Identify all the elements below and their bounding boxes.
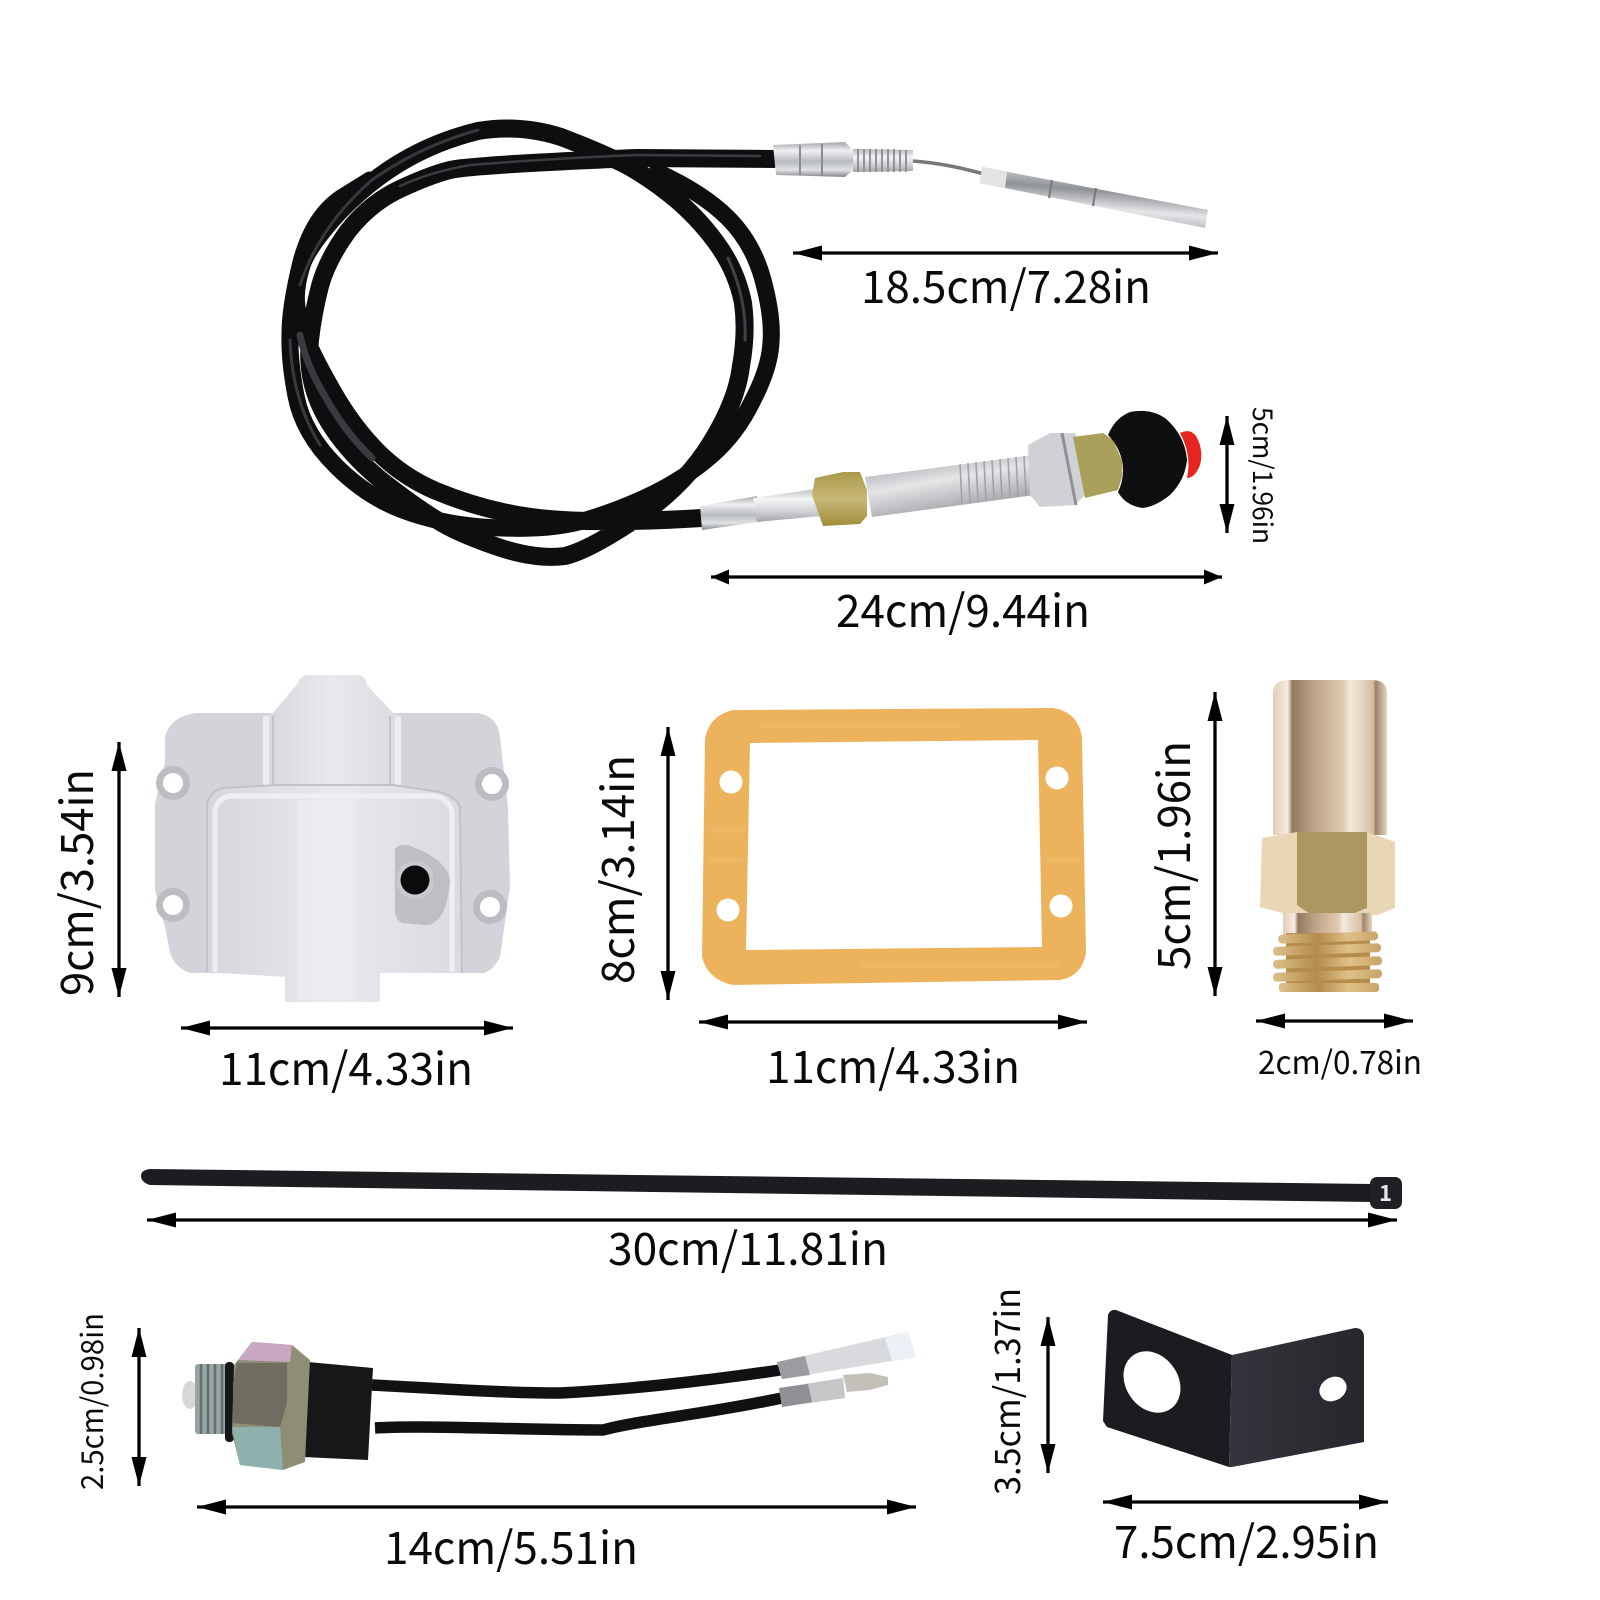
top boss xyxy=(263,675,400,790)
dimension: 3.5cm/1.37in: 3.5cm/1.37in xyxy=(980,1288,1031,1495)
bottom ferrule and threaded barrel xyxy=(700,433,1122,530)
hex nut xyxy=(232,1342,310,1470)
product: orange paper gasket xyxy=(702,708,1086,985)
dimension: 5cm/1.96in brass xyxy=(1138,692,1222,996)
dimension: 3.5cm/1.37in xyxy=(980,1288,1056,1495)
wire terminals xyxy=(777,1332,916,1407)
dimension: 18.5cm/7.28in xyxy=(793,246,1218,316)
product: push-pull control cable xyxy=(290,129,1208,557)
dimension: 11cm/4.33in cover: 11cm/4.33in xyxy=(219,1033,473,1098)
dimension: 14cm/5.51in: 14cm/5.51in xyxy=(384,1512,638,1577)
dimension: 9cm/3.54in: 9cm/3.54in xyxy=(41,769,106,996)
side port xyxy=(395,845,450,925)
central hump xyxy=(207,785,462,1002)
dimension: 7.5cm/2.95in: 7.5cm/2.95in xyxy=(1114,1506,1379,1571)
product: brass fitting xyxy=(1260,680,1395,992)
dimension: 9cm/3.54in xyxy=(41,742,126,997)
product: aluminium housing cover xyxy=(155,675,510,1002)
dimension: 18.5cm/7.28in: 18.5cm/7.28in xyxy=(861,251,1151,316)
dimension: 5cm/1.96in knob: 5cm/1.96in xyxy=(1245,407,1284,544)
dimension: 24cm/9.44in xyxy=(711,570,1222,640)
dimension: 2.5cm/0.98in: 2.5cm/0.98in xyxy=(68,1313,112,1490)
dimension: 2cm/0.78in xyxy=(1256,1014,1422,1084)
dimension: 11cm/4.33in cover xyxy=(181,1020,513,1098)
black cable loops xyxy=(290,129,773,557)
mounting plate xyxy=(155,713,510,973)
black body xyxy=(303,1362,373,1460)
gasket bolt holes xyxy=(716,766,1072,922)
product: black L bracket xyxy=(1103,1310,1364,1467)
zip tie head: 1 xyxy=(1379,1176,1392,1208)
bracket right face xyxy=(1229,1328,1364,1467)
zip tie head xyxy=(1370,1176,1402,1209)
dimension: 11cm/4.33in gasket: 11cm/4.33in xyxy=(766,1031,1020,1096)
dimension: 5cm/1.96in brass: 5cm/1.96in xyxy=(1138,741,1203,970)
dimension: 30cm/11.81in: 30cm/11.81in xyxy=(608,1213,888,1278)
dimension: 2cm/0.78in: 2cm/0.78in xyxy=(1258,1038,1422,1084)
product: black zip tie xyxy=(141,1169,1402,1209)
hex collar xyxy=(1260,832,1395,915)
dimension: 8cm/3.14in xyxy=(582,727,676,1000)
dimension: 11cm/4.33in gasket xyxy=(699,1014,1087,1096)
dimension: 2.5cm/0.98in xyxy=(68,1313,146,1490)
bracket left face xyxy=(1103,1310,1232,1467)
dimension: 5cm/1.96in knob xyxy=(1220,407,1284,544)
gasket texture xyxy=(708,725,1080,965)
dimension: 24cm/9.44in: 24cm/9.44in xyxy=(836,575,1090,640)
knob with red button xyxy=(1108,411,1201,508)
brass cylinder xyxy=(1273,680,1387,835)
dimension: 14cm/5.51in xyxy=(197,1500,916,1577)
threaded neck xyxy=(1273,913,1382,992)
pin end xyxy=(980,167,1208,228)
threaded stud xyxy=(182,1362,234,1442)
dimension: 8cm/3.14in: 8cm/3.14in xyxy=(582,755,647,984)
mounting holes xyxy=(160,770,506,920)
top ferrule and threaded end xyxy=(773,142,984,177)
wires xyxy=(372,1370,782,1430)
product: wired pressure switch xyxy=(182,1332,916,1470)
dimension: 30cm/11.81in xyxy=(147,1212,1397,1278)
